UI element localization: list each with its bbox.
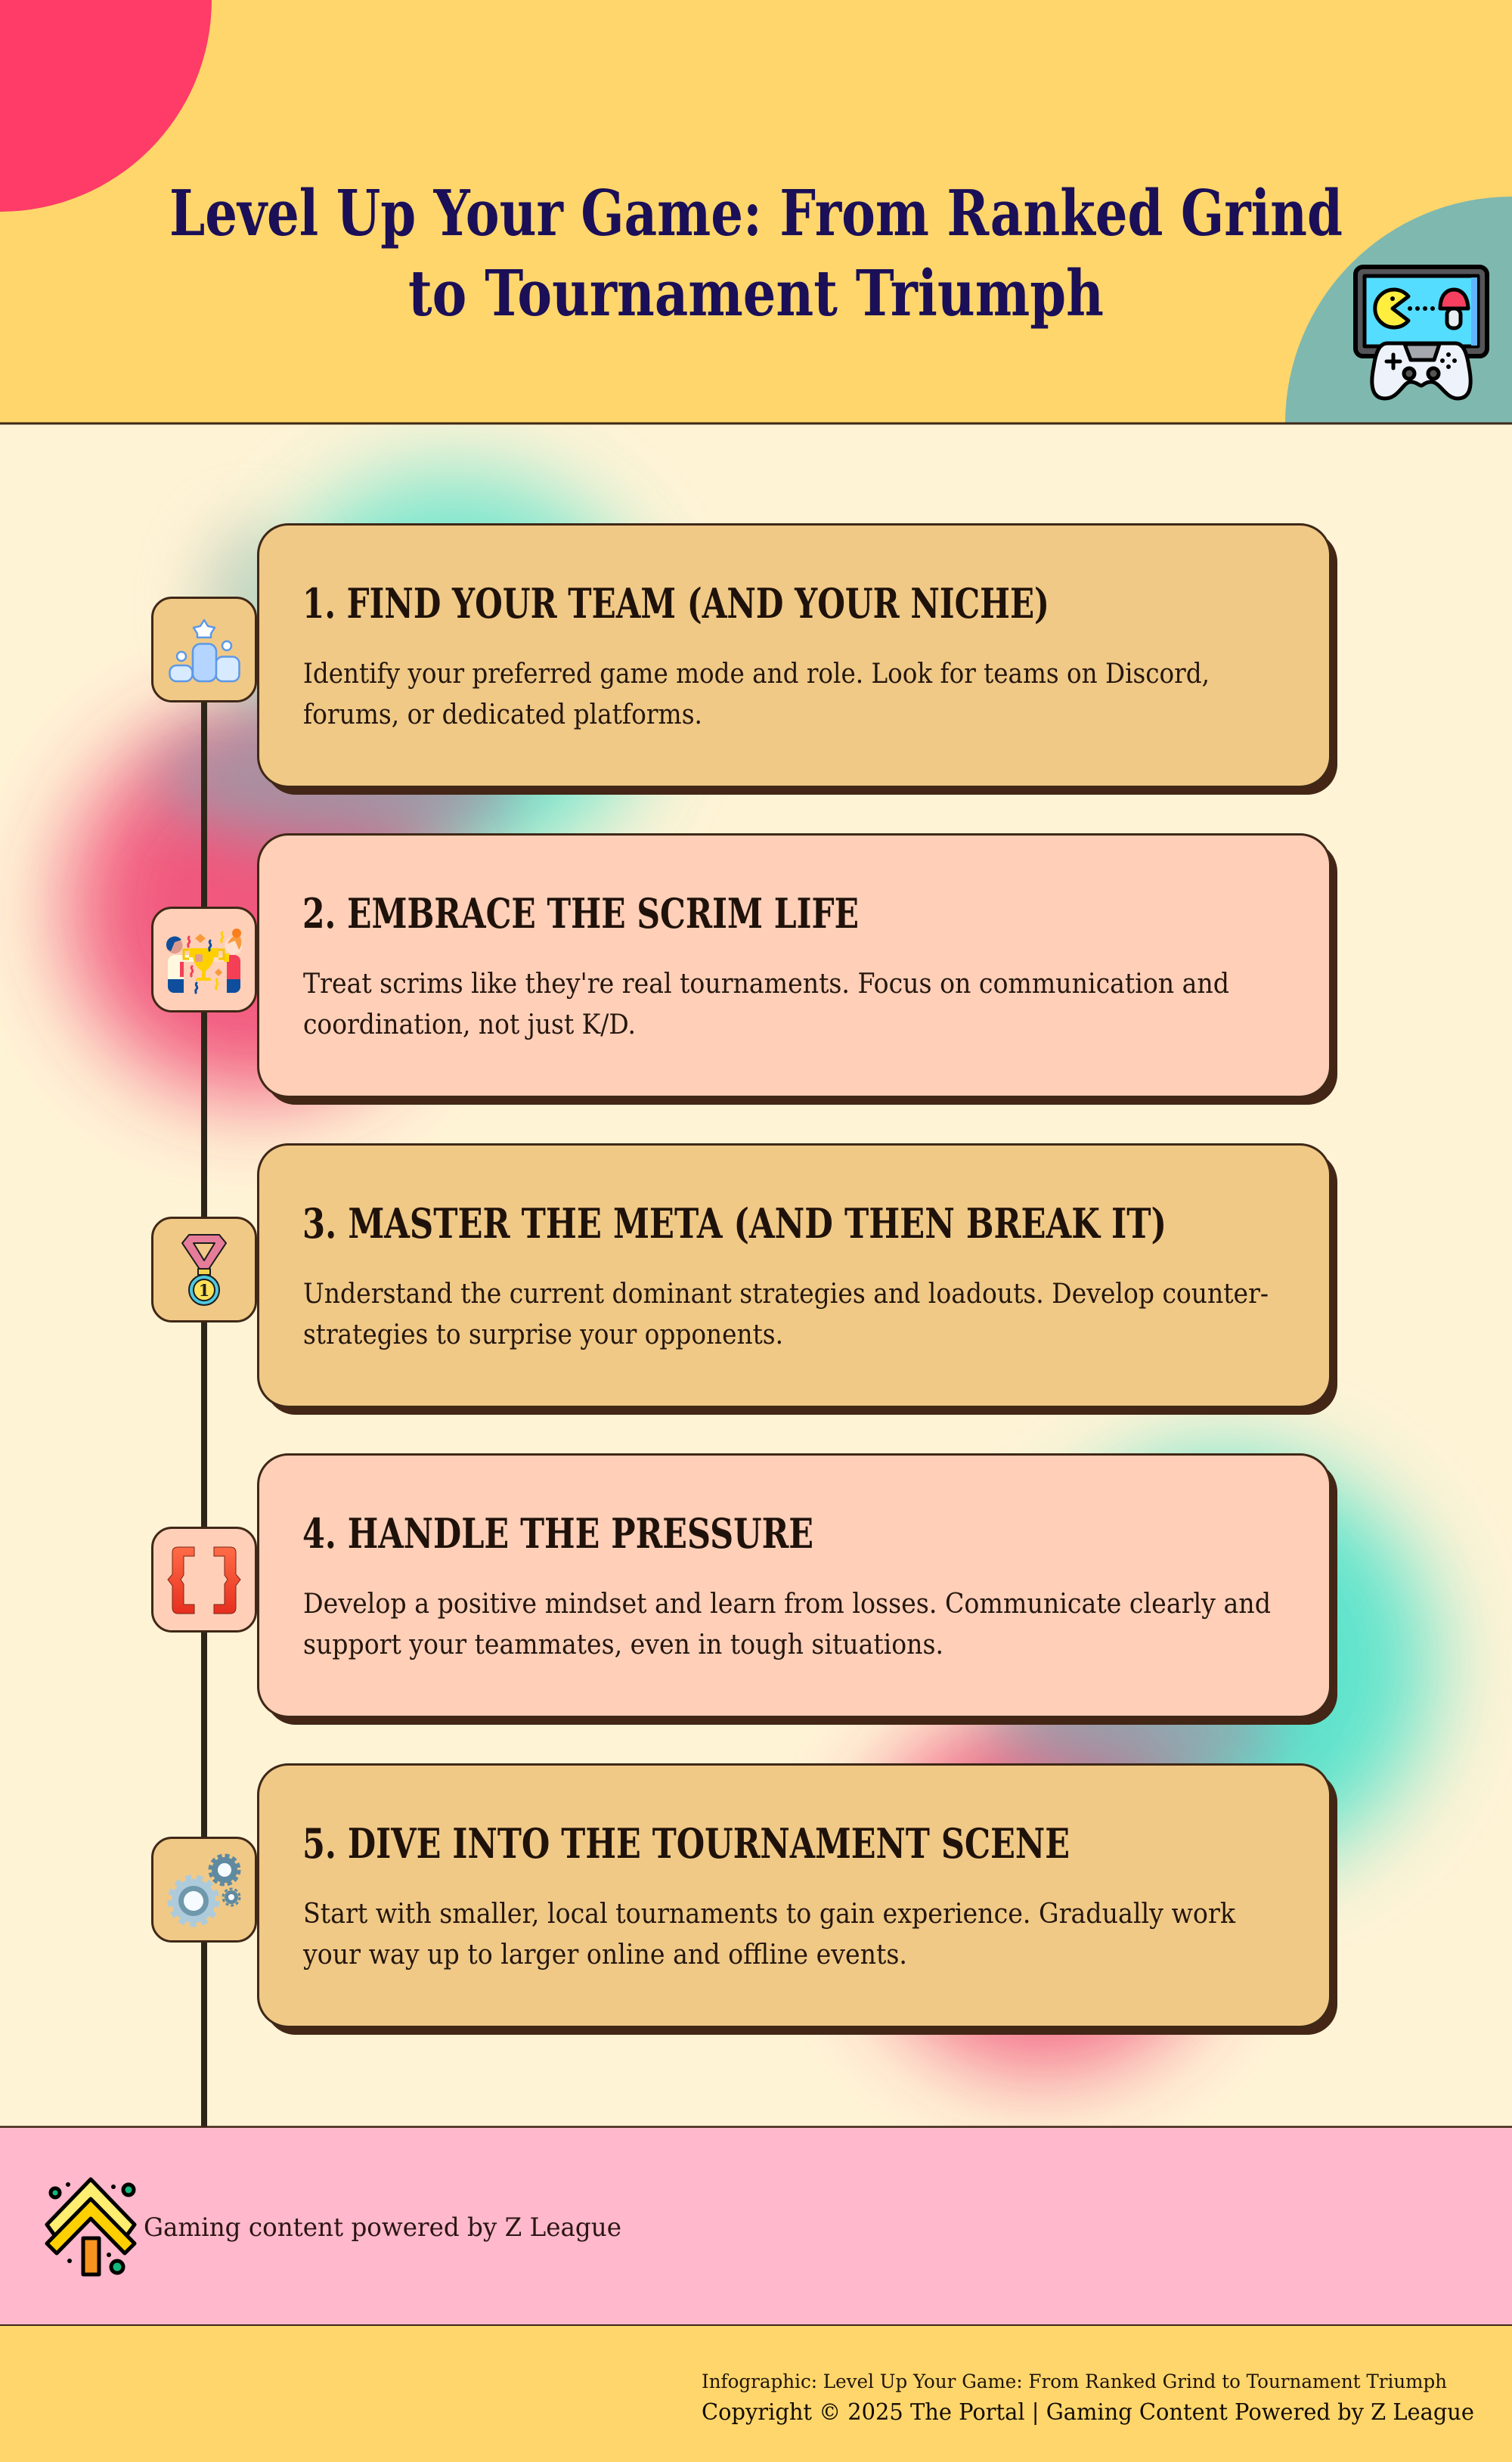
title: [169, 176, 1343, 330]
body: step 5: your way up to larger online and offline events.: [302, 1940, 907, 1971]
icon: game monitor and controller: [1356, 267, 1487, 398]
text: powered by: Gaming content powered by Z League: [144, 2212, 621, 2243]
body: step 1: Identify your preferred game mode and role. Look for teams on Discord,: [303, 659, 1210, 690]
text: copyright: Copyright © 2025 The Portal | Gaming Content Powered by Z League: [702, 2399, 1474, 2426]
icon: podium: [153, 597, 256, 702]
decorative blurred blobs: [68, 473, 1433, 2072]
text: infographic credit: Infographic: Level Up Your Game: From Ranked Grind to Tournament Triumph: [702, 2371, 1447, 2392]
timeline line: [201, 605, 207, 2126]
body: step 4: support your teammates, even in tough situations.: [303, 1629, 943, 1660]
body: step 3: [303, 1279, 1269, 1350]
title: to Tournament Triumph: [408, 256, 1104, 330]
heading: step 2: 2. EMBRACE THE SCRIM LIFE: [302, 889, 859, 938]
body: step 3: Understand the current dominant strategies and loadouts. Develop counter-: [303, 1279, 1269, 1310]
panel: footer: [0, 2326, 1512, 2462]
icon: medal: 1: [199, 1281, 209, 1300]
heading: step 5: 5. DIVE INTO THE TOURNAMENT SCENE: [302, 1819, 1070, 1868]
body: step 1: forums, or dedicated platforms.: [303, 699, 702, 730]
body: step 2: coordination, not just K/D.: [303, 1009, 636, 1040]
body: step 2: Treat scrims like they're real tournaments. Focus on communication and: [303, 969, 1229, 1000]
panel: step 5 card: [259, 1765, 1337, 2035]
body: step 1: [303, 659, 1210, 730]
panel: powered-by band: [0, 2126, 1512, 2326]
body: step 5: [302, 1899, 1236, 1971]
panel: step 1 card: [259, 525, 1337, 795]
icon: trophy team: [153, 907, 256, 1012]
decorative circle: pink: [0, 0, 212, 212]
panel: header: [0, 0, 1512, 423]
heading: step 4: 4. HANDLE THE PRESSURE: [302, 1509, 813, 1558]
decorative circle: teal: [1285, 197, 1512, 423]
icon: gears: [153, 1837, 256, 1942]
panel: main background: [0, 423, 1512, 2129]
body: step 4: Develop a positive mindset and learn from losses. Communicate clearly and: [303, 1589, 1271, 1620]
icon: medal: [153, 1217, 256, 1322]
body: step 4: [303, 1589, 1271, 1660]
body: step 2: [303, 969, 1229, 1040]
panel: step 3 card: [259, 1145, 1337, 1415]
heading: step 1: 1. FIND YOUR TEAM (AND YOUR NICHE): [302, 579, 1049, 628]
panel: step 2 card: [259, 835, 1337, 1105]
body: step 3: strategies to surprise your opponents.: [303, 1319, 783, 1350]
body: step 5: Start with smaller, local tournaments to gain experience. Gradually work: [303, 1899, 1236, 1930]
heading: step 3: 3. MASTER THE META (AND THEN BREAK IT): [302, 1199, 1167, 1248]
panel: step 4 card: [259, 1455, 1337, 1725]
header rule: [0, 422, 1512, 425]
icon: curly brackets: [153, 1527, 256, 1632]
icon: upward arrow: [47, 2179, 135, 2274]
